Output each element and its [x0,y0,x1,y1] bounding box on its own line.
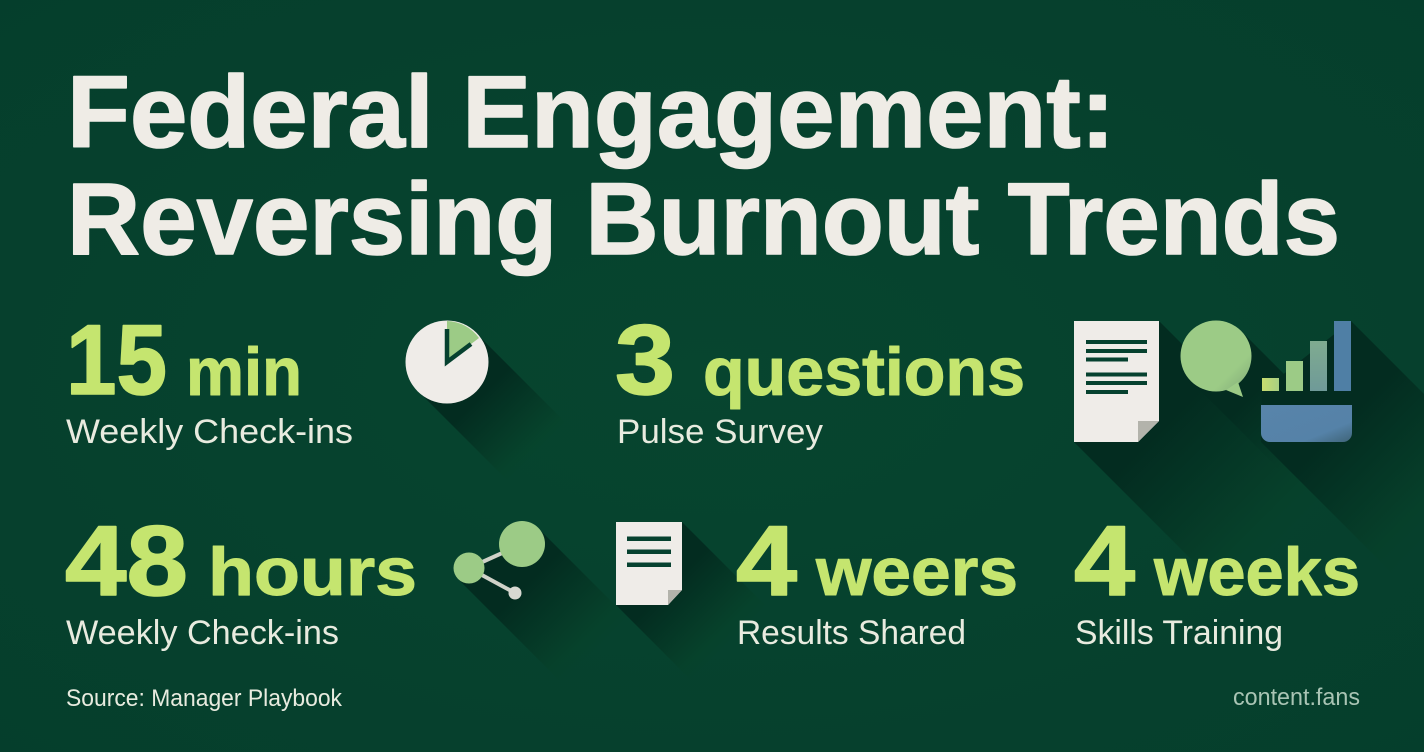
stat: 15 min weekly check-ins: min [186,334,302,410]
stat: 3 questions pulse survey [615,304,1025,451]
stat: 3 questions pulse survey: Pulse Survey [617,413,823,451]
stat: 15 min weekly check-ins [66,304,353,451]
title [67,55,1340,276]
source note: Source: Manager Playbook [66,685,343,712]
icon: clock [406,320,616,531]
brand credit: content.fans [1233,684,1360,711]
stat: 48 hours weekly check-ins: hours [208,534,417,610]
stat: 4 weeks skills training [1074,505,1360,652]
title: Reversing Burnout Trends [67,162,1340,276]
icon: share network [454,521,658,699]
stat: 4 weeks skills training: weeks [1153,534,1360,610]
stat: 3 questions pulse survey: 3 [615,304,675,415]
stat: 4 weers results shared [736,505,1018,652]
stat: 48 hours weekly check-ins: 48 [65,505,188,616]
stat: 4 weeks skills training: 4 [1074,505,1135,616]
title: Federal Engagement: [67,55,1115,169]
stat: 48 hours weekly check-ins [65,505,417,652]
stat: 15 min weekly check-ins: Weekly Check-ins [66,413,353,451]
stat: 3 questions pulse survey: questions [703,334,1025,410]
stat: 4 weers results shared: 4 [736,505,797,616]
icon: results document [616,522,802,725]
stat: 48 hours weekly check-ins: Weekly Check-ins [66,614,339,652]
stat: 4 weers results shared: weers [815,534,1018,610]
stat: 4 weers results shared: Results Shared [737,614,966,652]
icon: survey document [1074,321,1379,662]
stat: 15 min weekly check-ins: 15 [66,304,167,415]
icon: speech bubble [1180,320,1421,561]
icon: bar chart in tray [1261,321,1424,642]
stat: 4 weeks skills training: Skills Training [1075,614,1283,652]
